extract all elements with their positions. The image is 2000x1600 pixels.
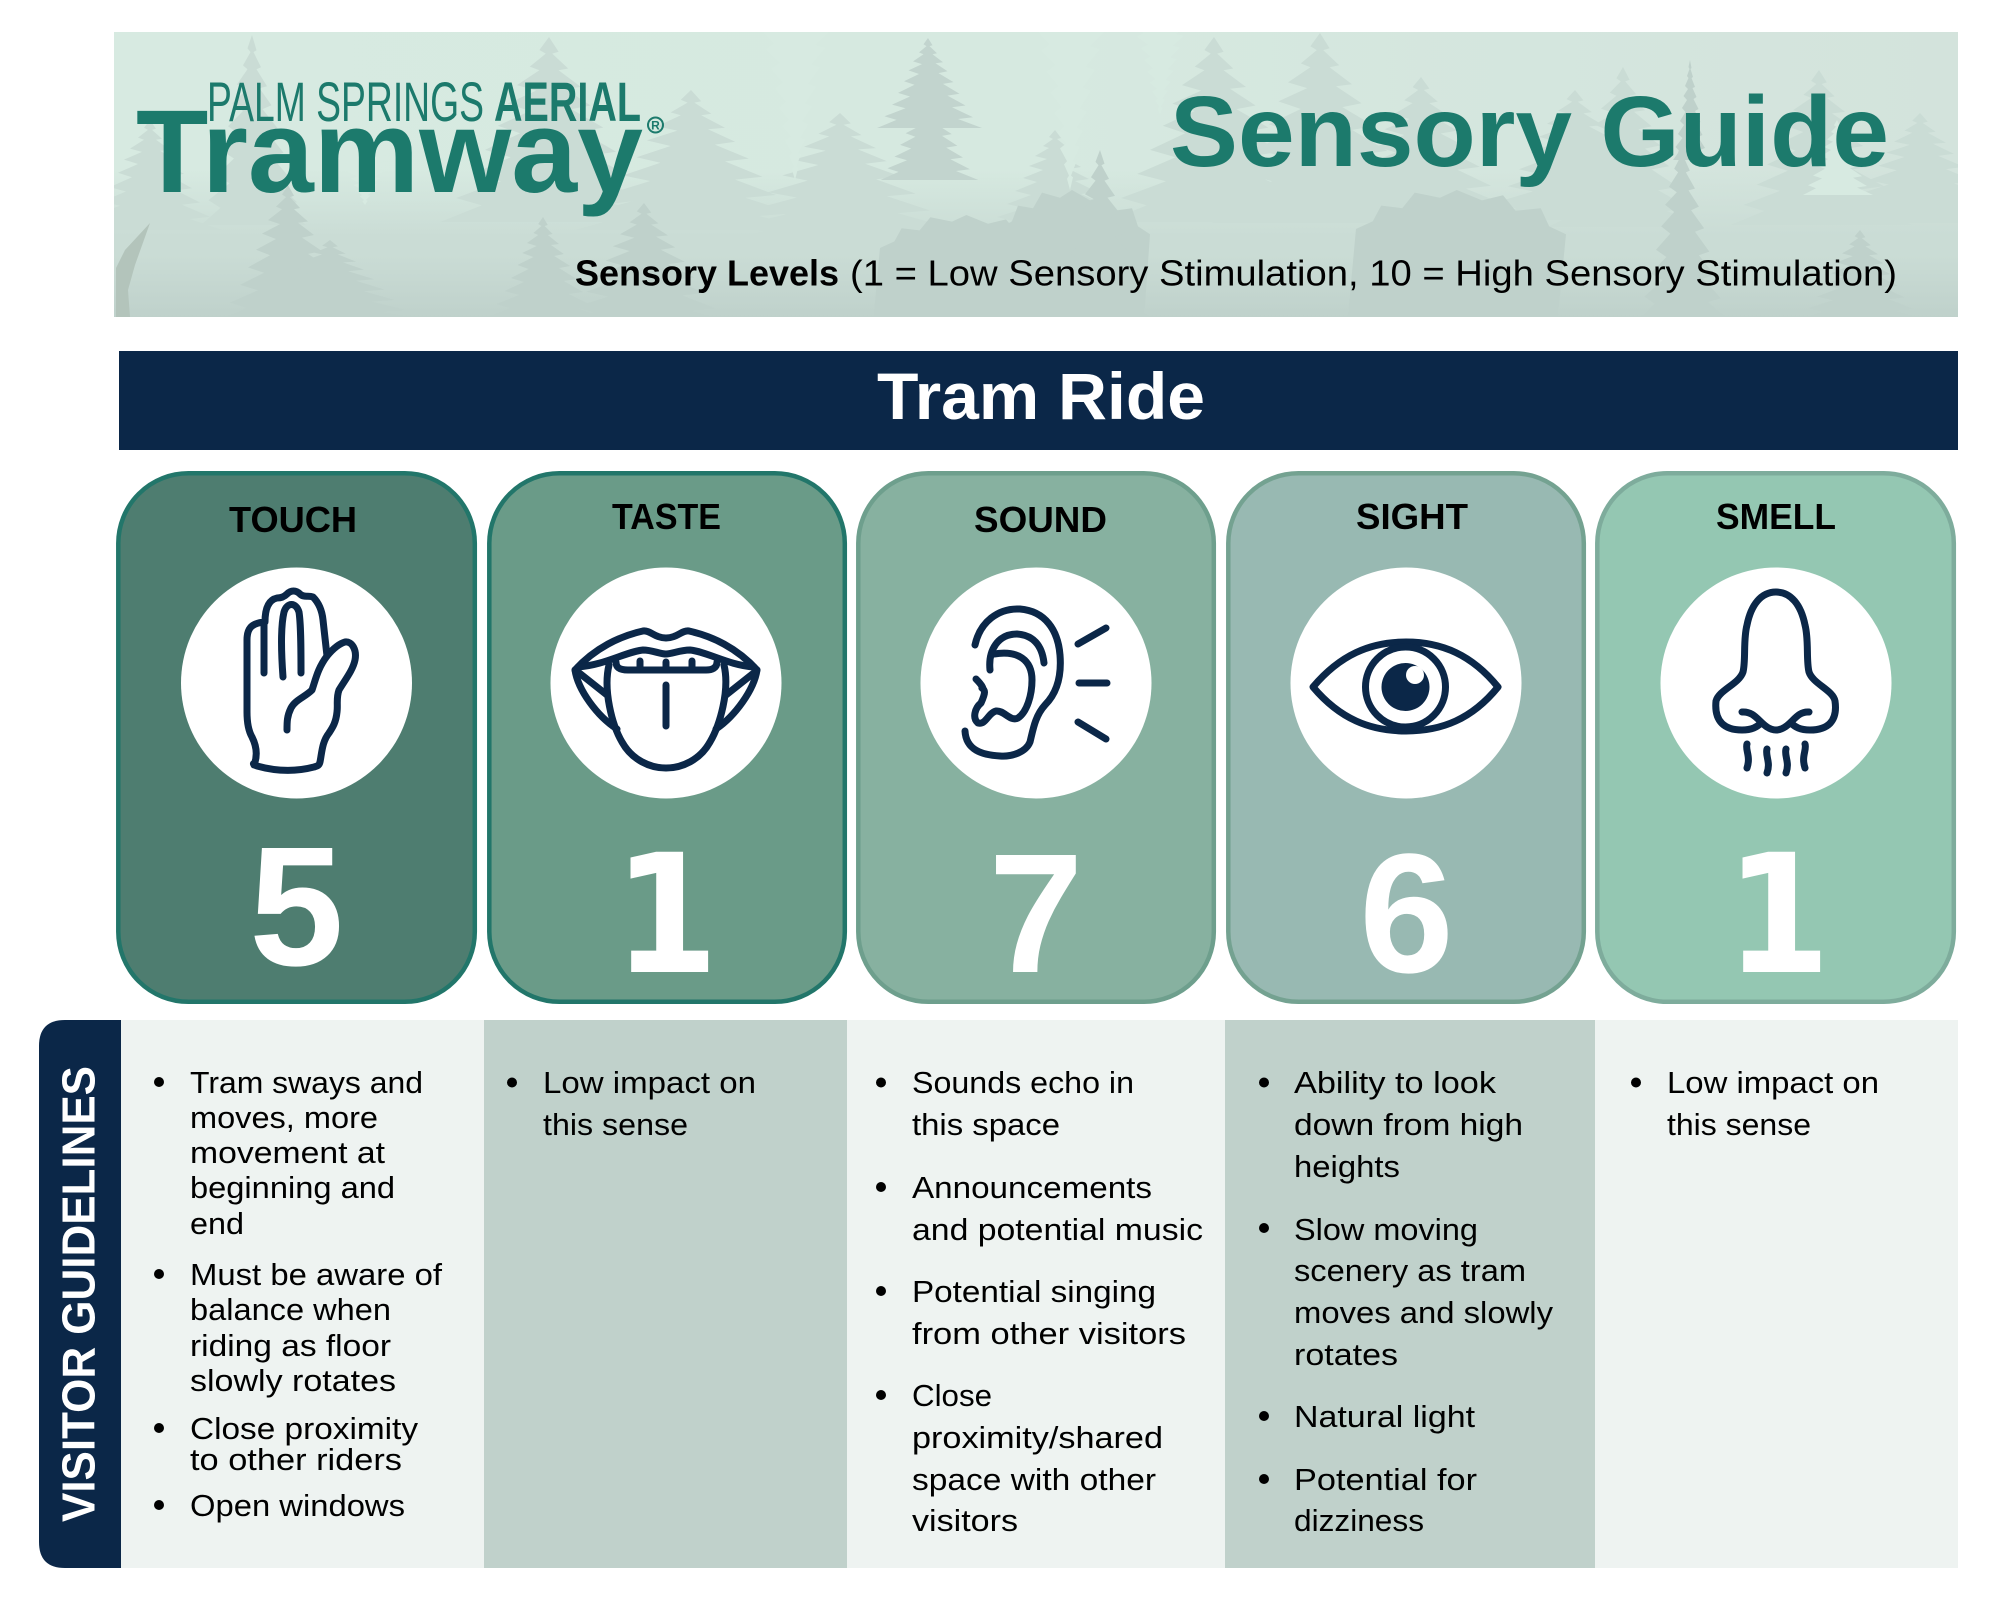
item: tram sways: movement at [190,1135,385,1170]
icon circle: taste [550,568,782,798]
item: proximity: Close proximity [190,1411,419,1446]
icon circle: smell [1660,568,1892,798]
item: scenery: rotates [1294,1337,1398,1372]
item: announcements [876,1170,1203,1247]
heading: smell: SMELL [1716,496,1836,537]
item: tram sways: beginning and [190,1170,395,1205]
item: heights: down from high [1294,1107,1523,1142]
item: shared space: visitors [912,1503,1018,1538]
item: natural light: Natural light [1294,1399,1475,1434]
logo word: Tramway: Tramway [136,86,643,218]
item: scenery: moves and slowly [1294,1295,1554,1330]
item: balance: Must be aware of [190,1257,442,1292]
icon: mouth and tongue [575,631,757,768]
logo line: Aerial: AERIAL [494,70,641,133]
registered mark [648,118,663,132]
item: proximity: to other riders [190,1442,402,1477]
item: low impact: Low impact on [1667,1065,1879,1100]
item: dizziness [1259,1462,1477,1538]
heading: touch: TOUCH [229,499,357,540]
item: tram sways: moves, more [190,1100,378,1135]
item: shared space [876,1378,1163,1538]
heading: taste: TASTE [612,496,721,537]
sensory level key: (1 = Low Sensory Stimulation, 10 = High Sensory Stimulation) [850,252,1897,294]
item: echo: Sounds echo in [912,1065,1134,1100]
item: dizziness: Potential for [1294,1462,1477,1497]
logo: Palm Springs Aerial Tramway [136,70,663,218]
item: announcements: Announcements [912,1170,1152,1205]
registered mark: R [651,118,660,132]
item: low impact: this sense [1667,1107,1811,1142]
panel: taste guidelines [484,1020,847,1568]
panel: sight card [1228,473,1584,1009]
item: singing: Potential singing [912,1274,1156,1309]
sensory level key: Sensory Levels [575,252,839,294]
heading: sound: SOUND [974,499,1107,540]
item: low impact [1631,1065,1879,1142]
item: low impact: this sense [543,1107,688,1142]
panel: taste card [489,473,845,1011]
item: balance: slowly rotates [190,1363,396,1398]
item: tram sways: Tram sways and [190,1065,423,1100]
score: smell: 1 [1726,819,1830,1011]
item: balance [154,1257,442,1398]
side tab: visitor guidelines: VISITOR GUIDELINES [52,1066,104,1522]
item: tram sways: end [190,1206,244,1241]
score: sound: 7 [989,819,1083,1009]
item: balance: balance when [190,1292,391,1327]
icon: nose [1716,592,1835,773]
icon circle: sound [920,568,1152,798]
panel: touch guidelines [121,1020,484,1568]
panel: touch card [118,473,475,1002]
panel: smell guidelines [1595,1020,1958,1568]
score: taste: 1 [614,819,718,1011]
item: open windows: Open windows [190,1488,405,1523]
section bar: Tram Ride: Tram Ride [877,359,1205,433]
item: echo [876,1065,1134,1142]
logo line: Palm Springs: PALM SPRINGS [207,70,484,133]
icon circle: sight [1290,568,1522,798]
panel: sight guidelines [1225,1020,1595,1568]
icon: eye [1313,642,1498,731]
item: scenery [1259,1212,1554,1372]
item: scenery: scenery as tram [1294,1253,1526,1288]
item: announcements: and potential music [912,1212,1203,1247]
item: dizziness: dizziness [1294,1503,1424,1538]
score: sight: 6 [1359,819,1454,1009]
item: proximity [154,1411,419,1477]
item: shared space: proximity/shared [912,1420,1163,1455]
item: scenery: Slow moving [1294,1212,1478,1247]
panel: sound card [858,473,1214,1009]
section bar: Tram Ride [119,351,1958,450]
score: touch: 5 [249,812,344,1002]
item: shared space: space with other [912,1462,1156,1497]
header banner [82,25,2000,325]
item: singing [876,1274,1186,1351]
icon: hand [247,591,355,770]
item: heights: heights [1294,1149,1400,1184]
item: heights: Ability to look [1294,1065,1497,1100]
item: shared space: Close [912,1378,992,1413]
item: heights [1259,1065,1523,1184]
item: echo: this space [912,1107,1060,1142]
icon: ear [965,609,1107,756]
item: low impact [507,1065,756,1142]
item: singing: from other visitors [912,1316,1186,1351]
icon circle: touch [181,568,412,798]
panel: smell card [1597,473,1954,1011]
title: Sensory Guide: Sensory Guide [1170,76,1889,188]
item: tram sways [154,1065,423,1241]
panel: sound guidelines [847,1020,1225,1568]
side tab: visitor guidelines [39,1020,121,1568]
item: balance: riding as floor [190,1328,391,1363]
item: low impact: Low impact on [543,1065,756,1100]
heading: sight: SIGHT [1356,496,1468,537]
